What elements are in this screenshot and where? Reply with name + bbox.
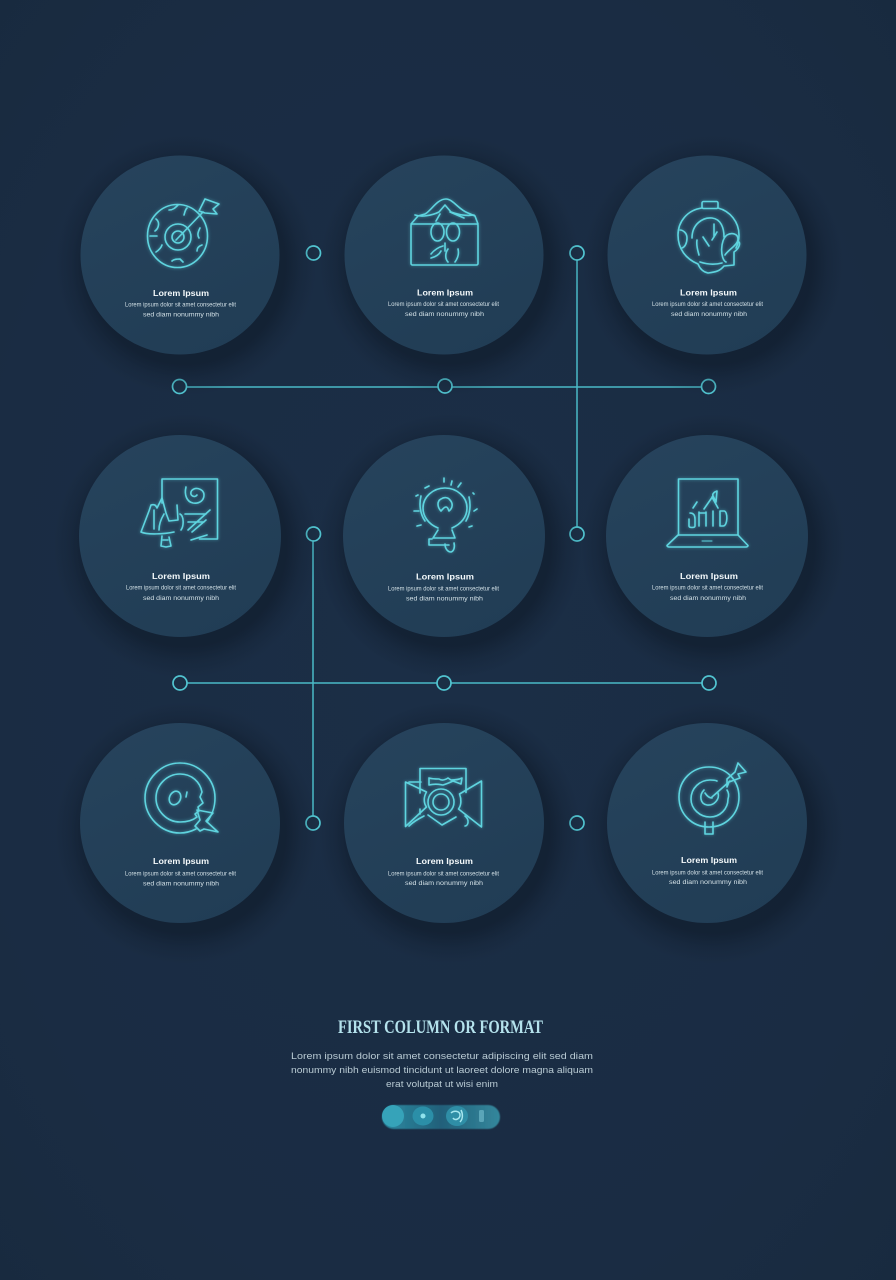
label: sed diam nonummy nibh bbox=[143, 595, 219, 602]
label bbox=[125, 856, 236, 888]
panel: laptop with chart bbox=[581, 414, 845, 678]
label: sed diam nonummy nibh bbox=[143, 880, 219, 888]
icon: light bulb bbox=[414, 478, 477, 552]
icon: presentation board bbox=[141, 479, 218, 547]
panel: envelope with masks bbox=[320, 135, 580, 395]
title: FIRST COLUMN OR FORMAT bbox=[338, 1017, 543, 1038]
label bbox=[388, 288, 499, 318]
label: Lorem Ipsum bbox=[153, 856, 209, 866]
label: Lorem ipsum dolor sit amet consectetur elit bbox=[652, 870, 763, 876]
label: Lorem Ipsum bbox=[417, 288, 473, 298]
description text: Lorem ipsum dolor sit amet consectetur adipiscing elit sed diam bbox=[291, 1051, 593, 1062]
label: sed diam nonummy nibh bbox=[671, 311, 747, 318]
label: sed diam nonummy nibh bbox=[406, 596, 483, 602]
label: Lorem Ipsum bbox=[153, 288, 209, 298]
icon: info dot bbox=[412, 1106, 434, 1126]
label: sed diam nonummy nibh bbox=[405, 311, 484, 318]
label bbox=[126, 571, 236, 602]
pill control with icons bbox=[382, 1105, 500, 1129]
label: Lorem ipsum dolor sit amet consectetur elit bbox=[125, 870, 236, 878]
label: sed diam nonummy nibh bbox=[670, 595, 746, 602]
label bbox=[652, 855, 763, 886]
panel: target with arrow bbox=[582, 702, 844, 964]
label: sed diam nonummy nibh bbox=[669, 879, 747, 886]
panel: head with brain bbox=[583, 135, 843, 395]
panel: camera lens bbox=[319, 702, 581, 964]
label bbox=[652, 571, 763, 602]
label bbox=[652, 288, 763, 318]
label bbox=[125, 288, 236, 318]
icon: swirl bbox=[446, 1106, 468, 1126]
label bbox=[388, 572, 499, 602]
label: Lorem Ipsum bbox=[680, 288, 737, 298]
panel: ring target bbox=[55, 702, 317, 964]
icon: solid dot bbox=[382, 1105, 404, 1127]
label: Lorem ipsum dolor sit amet consectetur elit bbox=[388, 870, 499, 878]
icon: laptop with chart bbox=[667, 479, 748, 547]
label: Lorem Ipsum bbox=[152, 571, 210, 581]
icon: bar bbox=[479, 1110, 484, 1122]
description text: erat volutpat ut wisi enim bbox=[386, 1079, 498, 1090]
label: Lorem Ipsum bbox=[416, 856, 473, 866]
label bbox=[388, 856, 499, 887]
icon: envelope with masks bbox=[411, 199, 478, 265]
label: Lorem ipsum dolor sit amet consectetur elit bbox=[652, 584, 763, 592]
label: sed diam nonummy nibh bbox=[143, 312, 219, 318]
panel: light bulb bbox=[318, 414, 582, 678]
icon: target with arrow bbox=[679, 763, 746, 834]
label: Lorem ipsum dolor sit amet consectetur elit bbox=[388, 301, 499, 308]
icon: target with flag bbox=[148, 199, 219, 268]
label: Lorem Ipsum bbox=[680, 571, 738, 581]
connector network bbox=[172, 246, 716, 830]
panel: presentation board bbox=[54, 414, 318, 678]
icon: ring target bbox=[145, 763, 218, 833]
label: Lorem ipsum dolor sit amet consectetur elit bbox=[126, 584, 236, 592]
icon: camera lens bbox=[406, 768, 482, 827]
description text: nonummy nibh euismod tincidunt ut laoreet dolore magna aliquam bbox=[291, 1065, 593, 1076]
label: Lorem ipsum dolor sit amet consectetur elit bbox=[388, 586, 499, 592]
icon: head with brain bbox=[678, 202, 739, 273]
description text bbox=[291, 1051, 593, 1090]
label: Lorem ipsum dolor sit amet consectetur elit bbox=[125, 302, 236, 308]
label: Lorem Ipsum bbox=[681, 855, 737, 865]
label: Lorem ipsum dolor sit amet consectetur elit bbox=[652, 301, 763, 308]
panel: target with flag bbox=[56, 135, 316, 395]
label: sed diam nonummy nibh bbox=[405, 880, 483, 887]
label: Lorem Ipsum bbox=[416, 572, 474, 582]
